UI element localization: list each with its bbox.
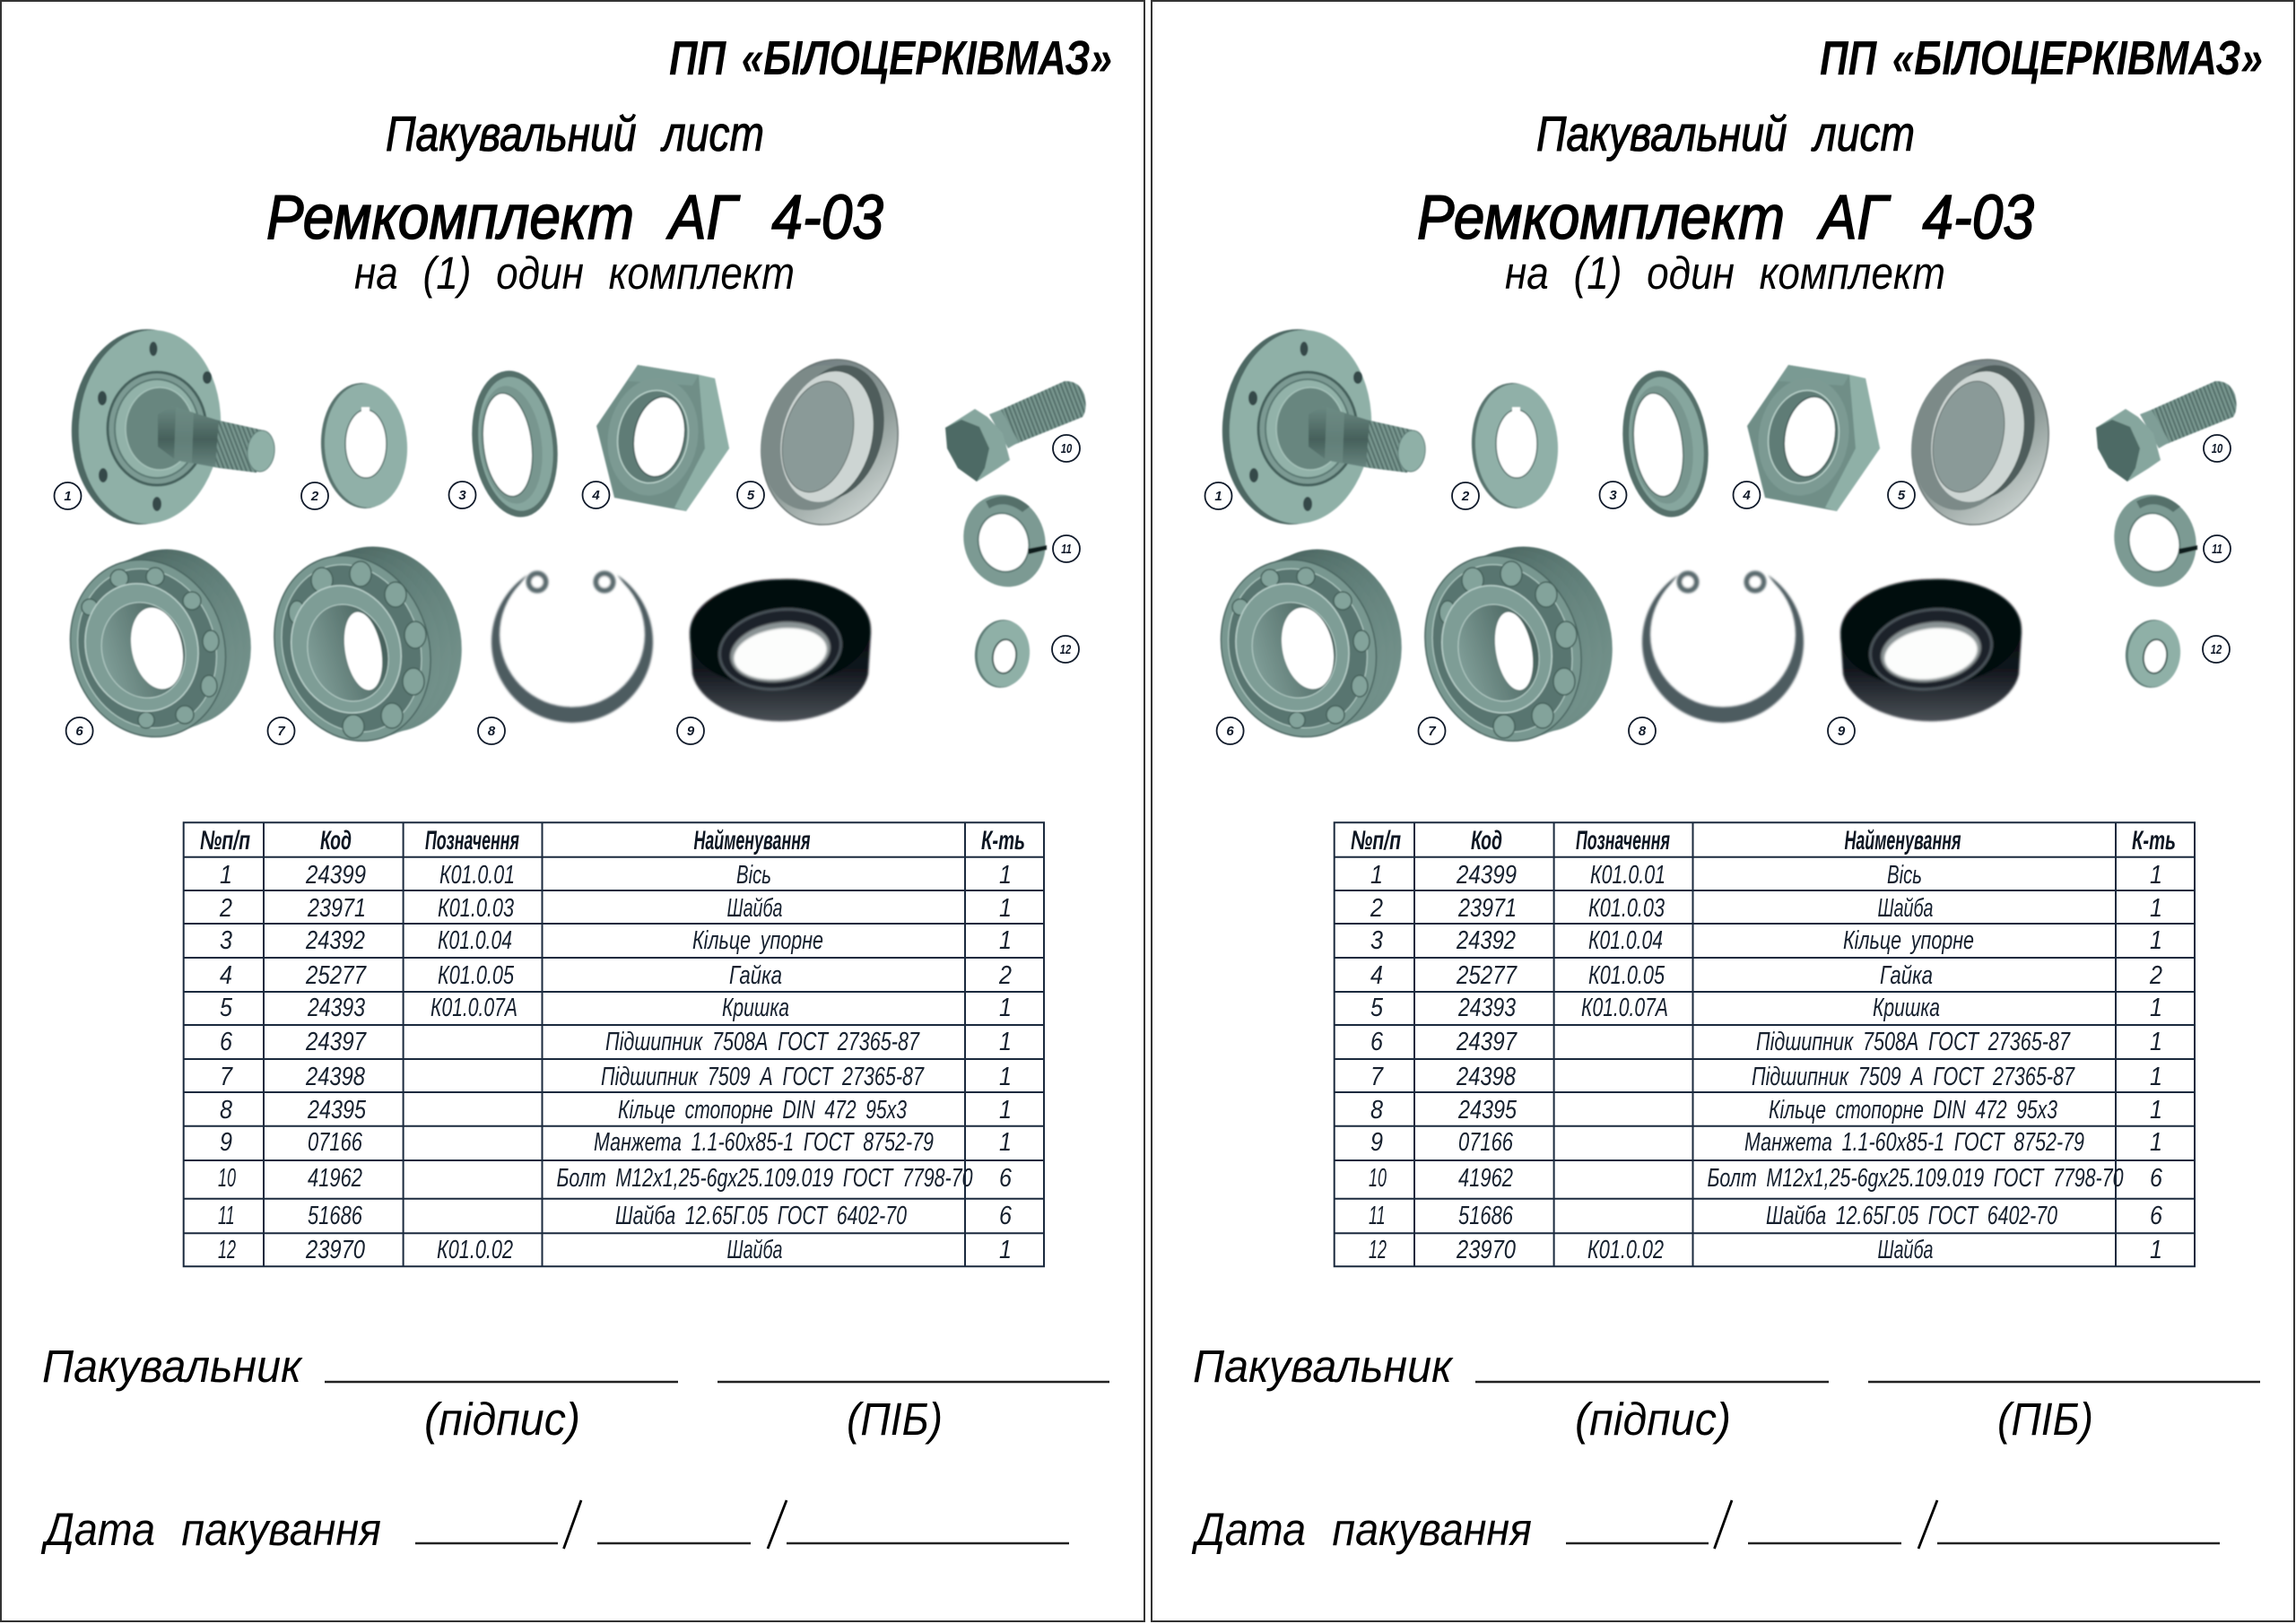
table rows: К01.0.01	[439, 861, 515, 890]
table rows: 1	[999, 1063, 1012, 1091]
table rows: Кільце упорне	[1843, 926, 1974, 955]
packing date block: Дата пакування	[40, 1504, 381, 1555]
table rows: Підшипник 7508А ГОСТ 27365-87	[1756, 1028, 2071, 1056]
table rows: 8	[220, 1096, 232, 1125]
icon: part 11 lock washer	[952, 484, 1057, 597]
table rows: 23970	[305, 1236, 365, 1264]
table rows: 1	[2150, 861, 2162, 890]
part number callouts: 6	[1226, 724, 1234, 739]
part number callouts: 7	[1428, 724, 1436, 739]
table rows: 24397	[1456, 1028, 1518, 1056]
part number callouts: 8	[1639, 724, 1647, 739]
table rows: 1	[220, 861, 232, 890]
part number callouts: 12	[1060, 641, 1072, 656]
table header: №п/п	[200, 826, 250, 855]
icon: part 2 washer	[1468, 381, 1561, 510]
table header: Код	[320, 826, 352, 855]
table rows: 1	[999, 1096, 1012, 1125]
table rows: 41962	[1458, 1164, 1513, 1193]
table rows: 1	[2150, 926, 2162, 955]
table rows: К01.0.07А	[1581, 994, 1668, 1022]
table rows: 6	[220, 1028, 233, 1056]
icon: part 7 bearing	[1402, 525, 1636, 761]
part number callouts: 4	[591, 488, 600, 503]
table rows: 7	[220, 1063, 234, 1091]
packing date block	[40, 1500, 1069, 1555]
icon: part 4 nut	[596, 365, 729, 511]
table rows: 3	[220, 926, 232, 955]
table rows: Манжета 1.1-60х85-1 ГОСТ 8752-79	[594, 1128, 934, 1157]
table rows: 10	[218, 1164, 236, 1193]
table rows: 9	[220, 1128, 232, 1157]
icon: part 5 cover	[1895, 345, 2066, 539]
table header: Найменування	[694, 826, 811, 855]
table rows: 51686	[1458, 1202, 1514, 1230]
table rows: К01.0.04	[438, 926, 512, 955]
table rows: 07166	[308, 1128, 363, 1157]
table rows: 24392	[305, 926, 365, 955]
table rows: 1	[2150, 1028, 2162, 1056]
table header: Найменування	[1844, 826, 1961, 855]
table rows: Кільце упорне	[692, 926, 823, 955]
table rows: 23970	[1456, 1236, 1516, 1264]
table header: Позначення	[425, 826, 519, 855]
table rows: 2	[1370, 894, 1383, 923]
table rows: Кільце стопорне DIN 472 95х3	[618, 1096, 907, 1125]
table rows: 1	[2150, 1128, 2162, 1157]
table rows: 3	[1370, 926, 1383, 955]
table rows: Кришка	[722, 994, 789, 1022]
packer signature block: Пакувальник	[1193, 1341, 1454, 1392]
icon: part 1 axle	[65, 325, 276, 529]
part number callouts: 1	[1214, 489, 1222, 504]
table header: К-ть	[981, 826, 1025, 855]
table rows: Шайба 12.65Г.05 ГОСТ 6402-70	[1766, 1202, 2057, 1230]
table header: К-ть	[2132, 826, 2176, 855]
table rows: 8	[1370, 1096, 1383, 1125]
table rows: 24397	[305, 1028, 368, 1056]
table rows: Гайка	[729, 961, 782, 990]
table rows: 1	[1370, 861, 1383, 890]
part number callouts: 9	[687, 724, 695, 739]
table rows: Шайба	[1878, 894, 1934, 923]
table rows: Шайба 12.65Г.05 ГОСТ 6402-70	[615, 1202, 907, 1230]
table rows: 4	[1370, 961, 1383, 990]
table rows: 9	[1370, 1128, 1383, 1157]
table rows: 1	[999, 1236, 1012, 1264]
table rows: 1	[999, 894, 1012, 923]
part number callouts: 11	[1061, 541, 1072, 556]
icon: part 7 bearing	[251, 525, 485, 761]
part number callouts: 5	[1898, 488, 1906, 503]
part number callouts: 8	[488, 724, 496, 739]
table rows: 2	[998, 961, 1012, 990]
panel: right packing list	[1152, 1, 2294, 1621]
icon: part 12 washer	[2122, 617, 2184, 690]
table rows: 1	[2150, 1236, 2162, 1264]
table rows: К01.0.03	[438, 894, 514, 923]
packer signature block: (ПІБ)	[847, 1394, 943, 1445]
table rows: Вісь	[736, 861, 771, 890]
part number callouts: 11	[2212, 541, 2222, 556]
table rows: 5	[220, 994, 233, 1022]
packer signature block: Пакувальник	[42, 1341, 303, 1392]
table rows: 24398	[305, 1063, 365, 1091]
part number callouts: 6	[75, 724, 83, 739]
part number callouts: 12	[2211, 641, 2222, 656]
table rows: 6	[999, 1202, 1013, 1230]
table rows: К01.0.01	[1590, 861, 1665, 890]
packing date block	[1191, 1500, 2220, 1555]
table rows: 25277	[1456, 961, 1518, 990]
part number callouts: 1	[64, 489, 72, 504]
part number callouts: 2	[310, 489, 319, 504]
table rows: 24395	[307, 1096, 367, 1125]
table rows: 1	[999, 861, 1012, 890]
table rows: 1	[2150, 1063, 2162, 1091]
table rows: 1	[2150, 994, 2162, 1022]
table rows: Вісь	[1887, 861, 1922, 890]
table rows: Манжета 1.1-60х85-1 ГОСТ 8752-79	[1744, 1128, 2084, 1157]
icon: part 6 bearing	[48, 529, 274, 757]
table rows: К01.0.04	[1588, 926, 1663, 955]
table rows: 2	[2149, 961, 2162, 990]
table rows: 07166	[1458, 1128, 1514, 1157]
table rows: 11	[1369, 1202, 1386, 1230]
title: repair kit: Ремкомплект АГ 4-03	[1417, 182, 2034, 252]
icon: part 10 bolt	[2096, 381, 2237, 482]
table header	[200, 826, 1025, 855]
table rows	[1369, 861, 2163, 1264]
table rows: Підшипник 7508А ГОСТ 27365-87	[605, 1028, 920, 1056]
icon: part 10 bolt	[945, 381, 1086, 482]
icon: part 8 retaining ring	[1642, 574, 1804, 723]
table rows: 1	[999, 1128, 1012, 1157]
table rows: 23971	[1457, 894, 1517, 923]
table rows: 24395	[1457, 1096, 1518, 1125]
table rows: 41962	[308, 1164, 362, 1193]
table rows: 24393	[307, 994, 365, 1022]
table rows: Болт М12х1,25-6gх25.109.019 ГОСТ 7798-70	[556, 1164, 972, 1193]
table rows: К01.0.02	[437, 1236, 513, 1264]
table rows: 7	[1370, 1063, 1385, 1091]
icon: part 2 washer	[317, 381, 411, 510]
panel border	[1152, 1, 2294, 1621]
table rows: 24398	[1456, 1063, 1516, 1091]
icon: part 3 thrust ring	[464, 366, 566, 522]
table rows: Кришка	[1873, 994, 1940, 1022]
part number callouts: 9	[1838, 724, 1846, 739]
packer signature block: (ПІБ)	[1997, 1394, 2093, 1445]
packer signature block	[42, 1341, 1109, 1445]
table rows: 6	[2150, 1164, 2163, 1193]
table rows: 10	[1369, 1164, 1387, 1193]
table rows: К01.0.03	[1588, 894, 1665, 923]
part number callouts	[1205, 435, 2231, 744]
part number callouts: 2	[1461, 489, 1470, 504]
table rows: Шайба	[1878, 1236, 1934, 1264]
title: repair kit: Ремкомплект АГ 4-03	[266, 182, 883, 252]
table rows: 1	[2150, 1096, 2162, 1125]
table rows: 24399	[1456, 861, 1517, 890]
table rows: К01.0.07А	[430, 994, 517, 1022]
table rows: К01.0.02	[1587, 1236, 1664, 1264]
part number callouts	[54, 435, 1080, 744]
table rows: Підшипник 7509 А ГОСТ 27365-87	[1752, 1063, 2075, 1091]
part number callouts: 3	[1609, 488, 1617, 503]
part number callouts: 10	[2212, 440, 2223, 456]
icon: part 6 bearing	[1198, 529, 1424, 757]
subtitle: packing list: Пакувальний лист	[386, 106, 764, 161]
table rows: 1	[2150, 894, 2162, 923]
table rows: 12	[218, 1236, 236, 1264]
table rows: 6	[1370, 1028, 1384, 1056]
packing date block: Дата пакування	[1191, 1504, 1532, 1555]
icon: part 8 retaining ring	[491, 574, 653, 723]
table rows: 24393	[1457, 994, 1516, 1022]
icon: part 3 thrust ring	[1614, 366, 1717, 522]
table rows: 51686	[308, 1202, 363, 1230]
table rows: 25277	[305, 961, 368, 990]
table rows: 24399	[305, 861, 366, 890]
table rows: 5	[1370, 994, 1384, 1022]
parts table	[1335, 822, 2195, 1266]
company name: ПП «БІЛОЦЕРКІВМАЗ»	[669, 31, 1112, 85]
table rows: 24392	[1456, 926, 1516, 955]
table rows: 6	[999, 1164, 1013, 1193]
table header: №п/п	[1351, 826, 1401, 855]
table rows	[218, 861, 1013, 1264]
part number callouts: 7	[277, 724, 285, 739]
quantity note: на (1) один комплект	[354, 248, 795, 299]
subtitle: packing list: Пакувальний лист	[1536, 106, 1915, 161]
parts table	[184, 822, 1044, 1266]
icon: part 9 seal	[686, 573, 874, 721]
table rows: 1	[999, 926, 1012, 955]
table rows: Гайка	[1880, 961, 1933, 990]
panel border	[1, 1, 1144, 1621]
table rows: 23971	[307, 894, 366, 923]
icon: part 9 seal	[1837, 573, 2025, 721]
icon: part 4 nut	[1747, 365, 1880, 511]
table rows: 1	[999, 994, 1012, 1022]
packer signature block: (підпис)	[1575, 1394, 1731, 1445]
table rows: 2	[219, 894, 232, 923]
table rows: Підшипник 7509 А ГОСТ 27365-87	[601, 1063, 925, 1091]
table rows: Болт М12х1,25-6gх25.109.019 ГОСТ 7798-70	[1708, 1164, 2124, 1193]
table rows: 4	[220, 961, 232, 990]
table rows: 11	[218, 1202, 235, 1230]
part number callouts: 3	[458, 488, 466, 503]
table rows: К01.0.05	[438, 961, 515, 990]
icon: part 1 axle	[1216, 325, 1427, 529]
table grid	[184, 822, 1044, 1266]
quantity note: на (1) один комплект	[1505, 248, 1945, 299]
table rows: 1	[999, 1028, 1012, 1056]
icon: part 12 washer	[971, 617, 1033, 690]
table header: Код	[1471, 826, 1502, 855]
part number callouts: 5	[747, 488, 755, 503]
table header	[1351, 826, 2176, 855]
icon: part 5 cover	[744, 345, 915, 539]
panel: left packing list	[1, 1, 1144, 1621]
table rows: 12	[1369, 1236, 1387, 1264]
part number callouts: 10	[1061, 440, 1073, 456]
part number callouts: 4	[1742, 488, 1751, 503]
table rows: Шайба	[726, 894, 782, 923]
table rows: Шайба	[726, 1236, 782, 1264]
packer signature block: (підпис)	[424, 1394, 580, 1445]
table rows: Кільце стопорне DIN 472 95х3	[1769, 1096, 2057, 1125]
table rows: 6	[2150, 1202, 2163, 1230]
table grid	[1335, 822, 2195, 1266]
packer signature block	[1193, 1341, 2260, 1445]
table header: Позначення	[1576, 826, 1670, 855]
icon: part 11 lock washer	[2102, 484, 2208, 597]
table rows: К01.0.05	[1588, 961, 1665, 990]
